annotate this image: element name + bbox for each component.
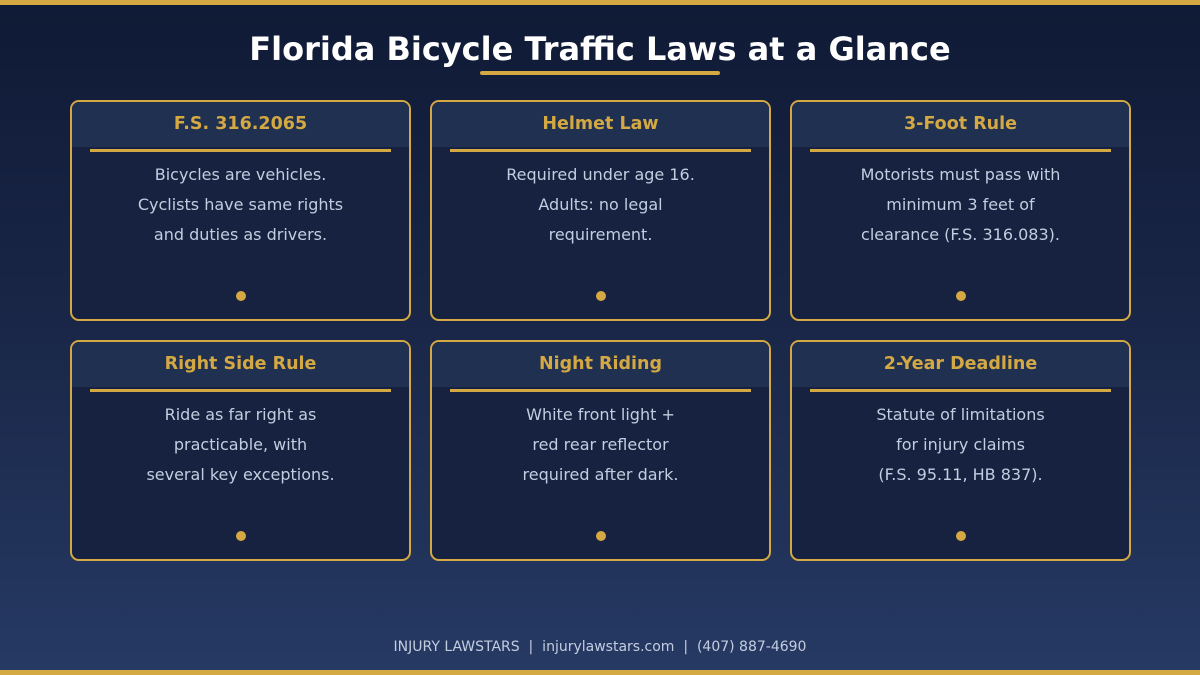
card: 3-Foot Rule: 3-Foot Rule bbox=[904, 114, 1017, 134]
card: 3-Foot Rule: minimum 3 feet of bbox=[886, 195, 1035, 214]
card: Right Side Rule bbox=[70, 340, 411, 561]
card: Right Side Rule: several key exceptions. bbox=[146, 465, 335, 484]
card: 2-Year Deadline: (F.S. 95.11, HB 837). bbox=[878, 465, 1043, 484]
card: Night Riding: required after dark. bbox=[523, 465, 678, 484]
card: Helmet Law: Required under age 16. bbox=[506, 165, 695, 184]
card: Right Side Rule: Right Side Rule bbox=[165, 354, 316, 374]
card: Helmet Law: Helmet Law bbox=[542, 114, 659, 134]
card: Helmet Law: Adults: no legal bbox=[538, 195, 663, 214]
card: 3-Foot Rule: clearance (F.S. 316.083). bbox=[861, 225, 1060, 244]
card: 2-Year Deadline: Statute of limitations bbox=[876, 405, 1045, 424]
card: 2-Year Deadline: 2-Year Deadline bbox=[884, 354, 1037, 374]
card: 2-Year Deadline bbox=[790, 340, 1131, 561]
card: 3-Foot Rule: Motorists must pass with bbox=[861, 165, 1060, 184]
card: Right Side Rule: Ride as far right as bbox=[165, 405, 316, 424]
card: Helmet Law: requirement. bbox=[549, 225, 652, 244]
card: Night Riding: Night Riding bbox=[539, 354, 662, 374]
card: Night Riding bbox=[430, 340, 771, 561]
card: Night Riding: White front light + bbox=[526, 405, 675, 424]
card: 2-Year Deadline: for injury claims bbox=[896, 435, 1025, 454]
card: Right Side Rule: practicable, with bbox=[174, 435, 307, 454]
title: Florida Bicycle Traffic Laws at a Glance bbox=[249, 30, 951, 68]
card: Helmet Law bbox=[430, 100, 771, 321]
card: F.S. 316.2065: F.S. 316.2065 bbox=[174, 114, 307, 134]
footer: INJURY LAWSTARS | injurylawstars.com | (407) 887-4690 bbox=[394, 639, 806, 655]
card: F.S. 316.2065 bbox=[70, 100, 411, 321]
card: 3-Foot Rule bbox=[790, 100, 1131, 321]
card: F.S. 316.2065: and duties as drivers. bbox=[154, 225, 327, 244]
card: Night Riding: red rear reflector bbox=[532, 435, 669, 454]
card: F.S. 316.2065: Cyclists have same rights bbox=[138, 195, 343, 214]
card: F.S. 316.2065: Bicycles are vehicles. bbox=[155, 165, 326, 184]
